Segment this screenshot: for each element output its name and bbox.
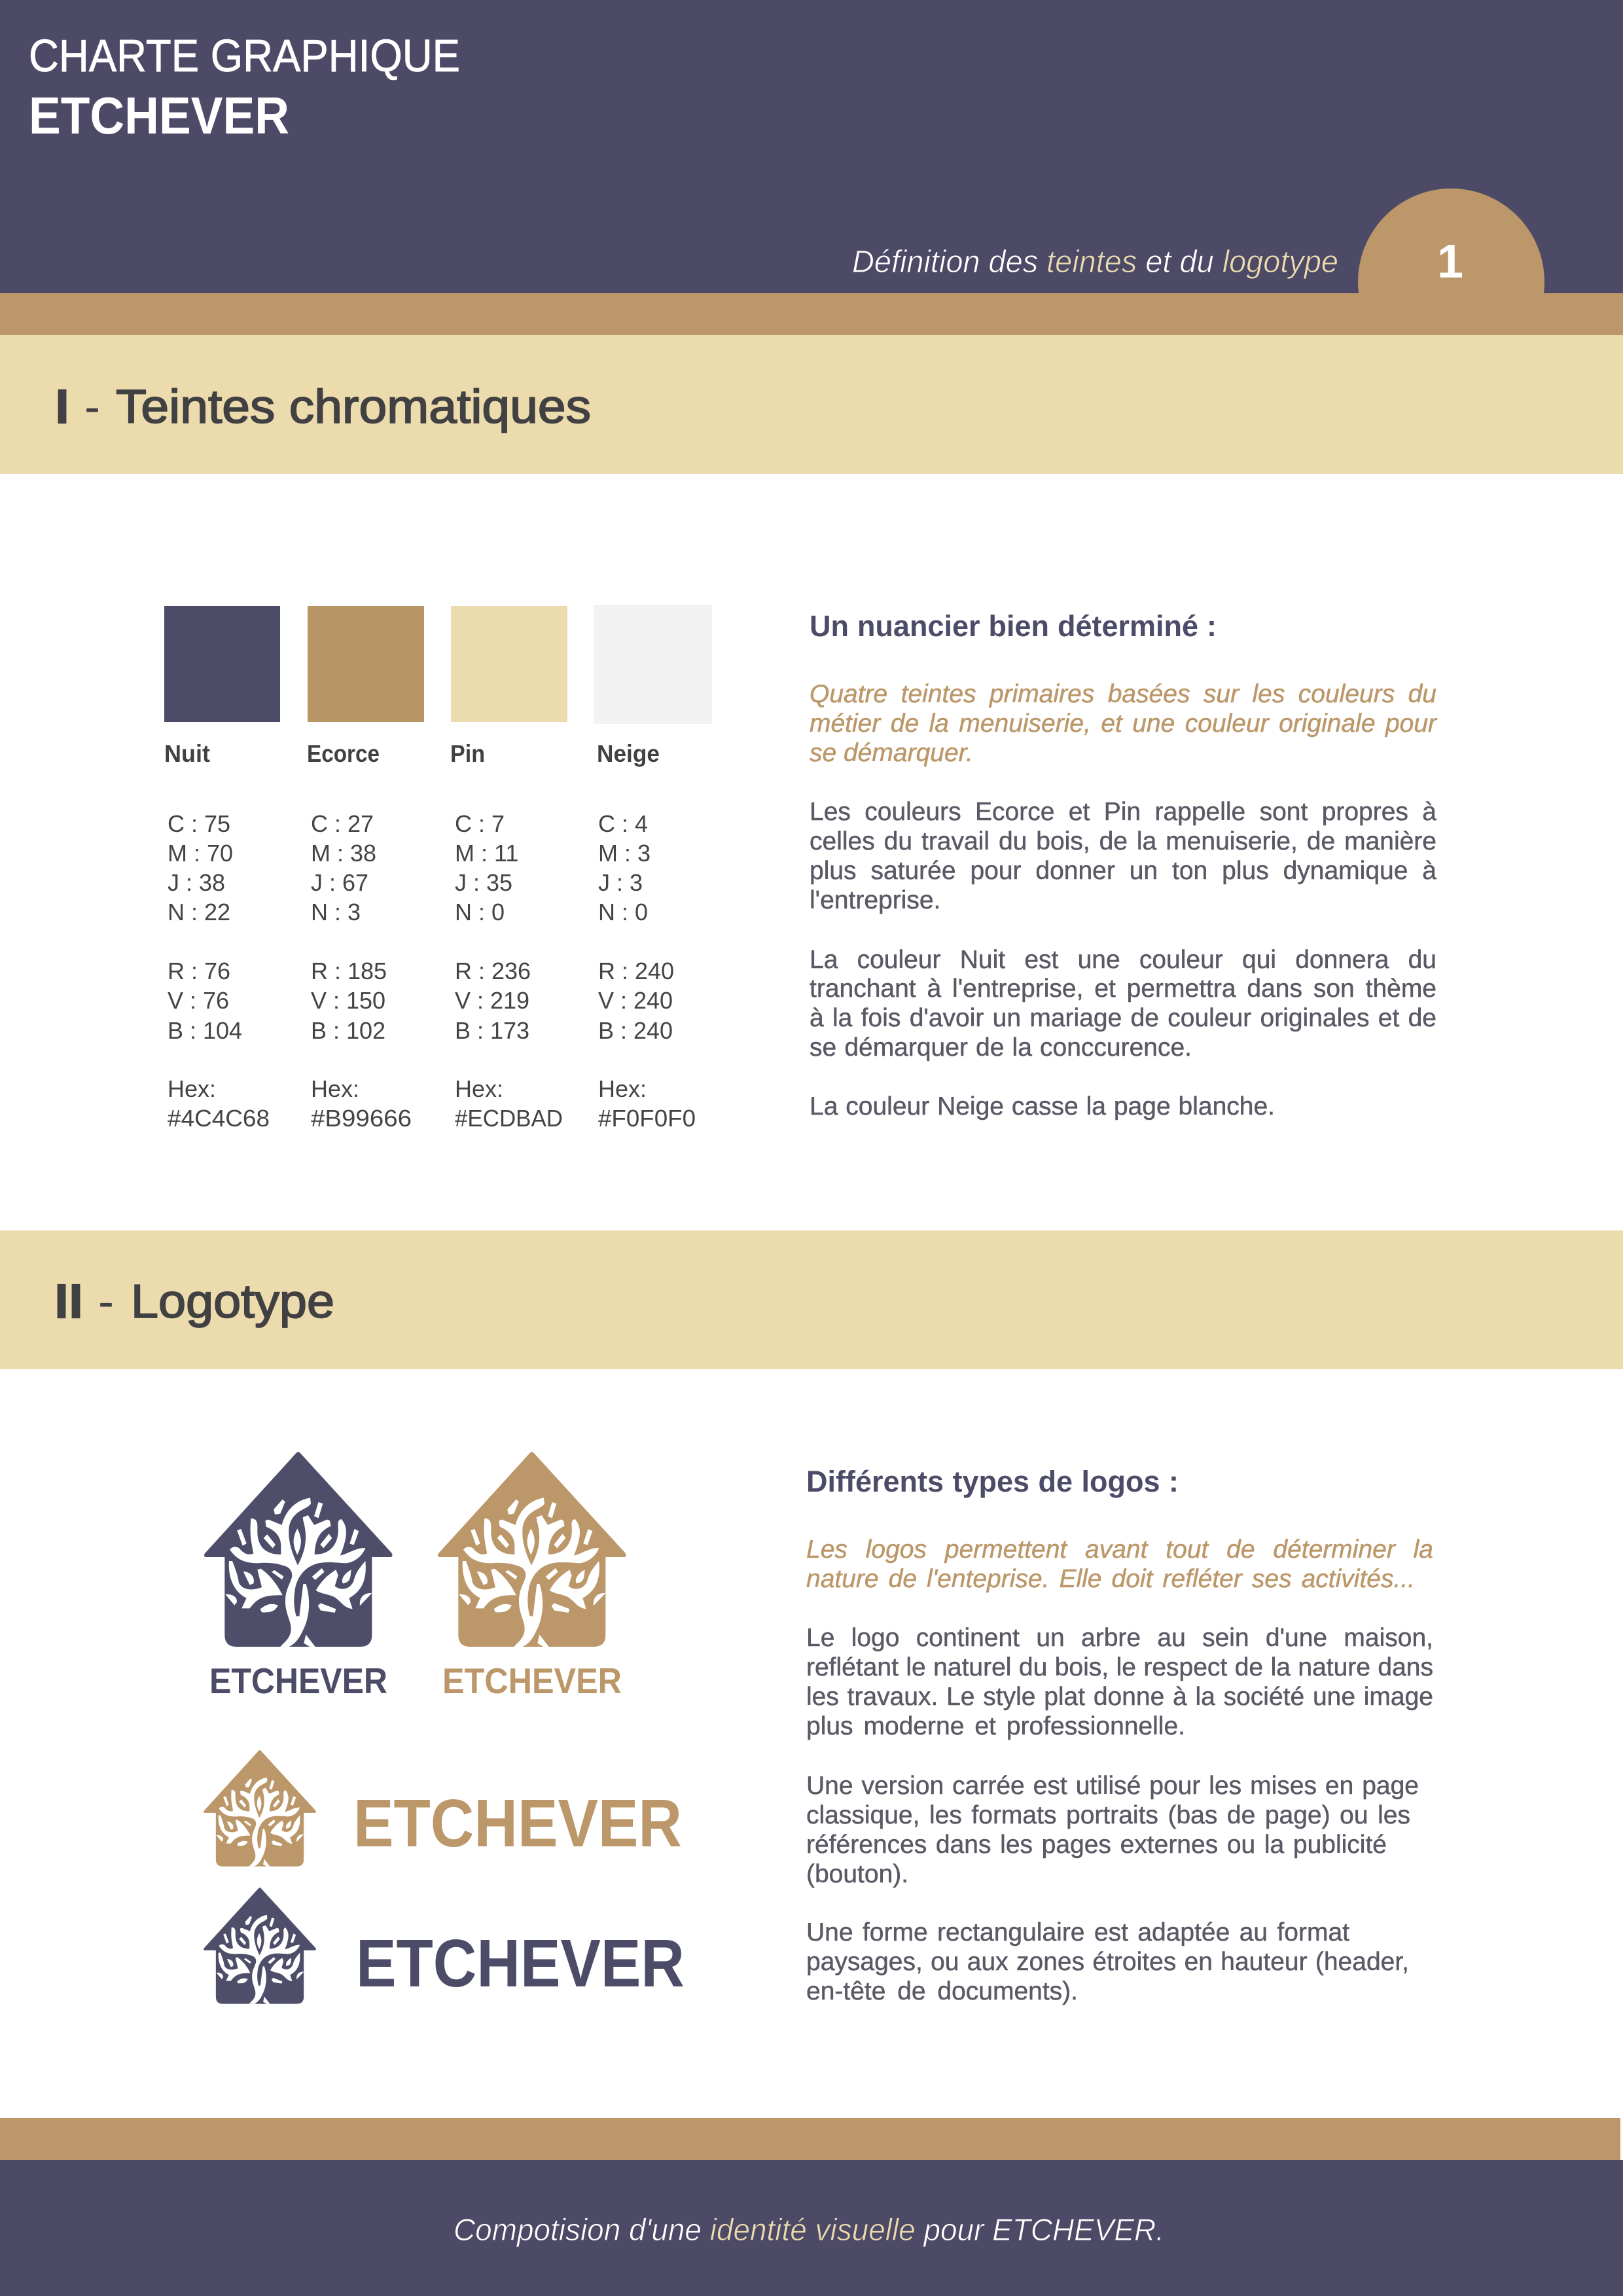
values: Pin: M : 11	[455, 840, 518, 867]
section heading II: II	[55, 1276, 82, 1328]
values: Neige: M : 3	[598, 840, 651, 867]
intro: nuancier	[809, 680, 1438, 767]
intro: logos: nature de l'enteprise. Elle doit refléter ses activités...	[806, 1565, 1415, 1593]
paragraph: version carrée: Une version carrée est utilisé pour les mises en page	[806, 1772, 1419, 1800]
values: Nuit	[168, 810, 270, 1132]
values: Neige: C : 4	[598, 810, 648, 837]
values: Pin: B : 173	[455, 1017, 529, 1044]
logo: vertical tan	[438, 1452, 626, 1701]
footer	[0, 2118, 1623, 2296]
title	[29, 30, 460, 145]
values: Pin: Hex:	[455, 1075, 503, 1102]
values: Neige: #F0F0F0	[598, 1105, 696, 1132]
values: Ecorce: M : 38	[311, 840, 376, 867]
paragraph: forme rectangulaire	[806, 1918, 1409, 2005]
paragraph: Nuit: se démarquer de la conccurence.	[810, 1033, 1192, 1062]
circle: page number badge	[1358, 188, 1544, 375]
values: Ecorce: N : 3	[311, 899, 361, 925]
heading: nuancier: Un nuancier bien déterminé :	[810, 609, 1217, 643]
subtitle: Définition des teintes et du logotype	[852, 245, 1338, 279]
paragraph: Nuit: tranchant à l'entreprise, et permettra dans son thème	[810, 975, 1436, 1003]
paragraph: Ecorce et Pin	[810, 798, 1437, 914]
logo: horizontal tan: ETCHEVER	[353, 1785, 682, 1861]
values: Neige: R : 240	[598, 958, 674, 984]
logo: vertical tan: ETCHEVER	[442, 1660, 622, 1701]
paragraph: forme rectangulaire: Une forme rectangulaire est adaptée au format	[806, 1918, 1349, 1946]
values: Pin: V : 219	[455, 987, 529, 1014]
text block: nuancier	[809, 609, 1438, 1121]
text block: logos	[806, 1465, 1433, 2005]
values: Pin: R : 236	[455, 958, 531, 984]
section heading I: Teintes chromatiques	[116, 381, 591, 433]
title: ETCHEVER	[29, 86, 289, 145]
swatch: Ecorce	[308, 606, 424, 722]
logo: horizontal tan	[204, 1750, 682, 1867]
values: Pin: N : 0	[455, 899, 505, 925]
swatch names: Ecorce	[307, 740, 380, 767]
header band	[0, 0, 1623, 375]
paragraph: Nuit: La couleur Nuit est une couleur qui donnera du	[810, 946, 1436, 974]
values: Nuit: Hex:	[168, 1075, 216, 1102]
section heading I	[0, 335, 1623, 474]
section heading I: I	[56, 381, 69, 433]
values: Nuit: V : 76	[168, 987, 229, 1014]
values: Nuit: M : 70	[168, 840, 233, 867]
paragraph: Ecorce et Pin: l'entreprise.	[810, 886, 940, 914]
swatch names: Nuit	[164, 740, 210, 767]
swatch names: Neige	[597, 740, 660, 767]
section heading I: -	[84, 381, 100, 433]
values: Neige	[598, 810, 696, 1132]
logo: vertical dark: ETCHEVER	[209, 1660, 387, 1701]
title: CHARTE GRAPHIQUE	[29, 30, 460, 81]
section heading II: Logotype	[131, 1276, 334, 1328]
paragraph: arbre et maison	[806, 1624, 1433, 1740]
intro: nuancier: métier de la menuiserie, et une couleur originale pour	[810, 709, 1436, 738]
values: Pin: C : 7	[455, 810, 505, 837]
section heading II	[0, 1230, 1623, 1369]
paragraph: version carrée: classique, les formats portraits (bas de page) ou les	[806, 1801, 1410, 1829]
values: Neige: N : 0	[598, 899, 648, 925]
paragraph: version carrée: (bouton).	[806, 1860, 908, 1888]
values: Nuit: N : 22	[168, 899, 230, 925]
values: Neige: V : 240	[598, 987, 673, 1014]
paragraph: arbre et maison: les travaux. Le style plat donne à la société une image	[806, 1683, 1433, 1711]
values: Neige: J : 3	[598, 869, 643, 896]
swatch names	[164, 740, 660, 767]
paragraph: Nuit: à la fois d'avoir un mariage de couleur originales et de	[810, 1004, 1436, 1032]
footer text: Compotision d'une identité visuelle pour ETCHEVER.	[454, 2212, 1164, 2247]
paragraph: Neige: La couleur Neige casse la page blanche.	[810, 1092, 1275, 1121]
values: Pin: J : 35	[455, 869, 512, 896]
swatch: Pin	[451, 606, 567, 722]
values: Nuit: R : 76	[168, 958, 230, 984]
intro: logos: Les logos permettent avant tout de déterminer la	[806, 1535, 1433, 1564]
values: Pin	[455, 810, 563, 1132]
values: Ecorce: C : 27	[311, 810, 374, 837]
logo: horizontal dark	[204, 1888, 685, 2004]
intro: nuancier: Quatre teintes primaires basées sur les couleurs du	[810, 680, 1436, 708]
values: Ecorce: R : 185	[311, 958, 387, 984]
swatch: Nuit	[164, 606, 280, 722]
colour swatches	[164, 605, 712, 724]
intro: logos	[806, 1535, 1433, 1593]
paragraph: forme rectangulaire: paysages, ou aux zones étroites en hauteur (header,	[806, 1948, 1409, 1976]
values: Nuit: C : 75	[168, 810, 230, 837]
logo: vertical dark	[204, 1452, 393, 1701]
values: Neige: Hex:	[598, 1075, 647, 1102]
paragraph: version carrée	[806, 1772, 1419, 1888]
values: Ecorce: V : 150	[311, 987, 385, 1014]
values: Nuit: B : 104	[168, 1017, 242, 1044]
paragraph: Ecorce et Pin: Les couleurs Ecorce et Pin rappelle sont propres à	[810, 798, 1436, 826]
values: Nuit: J : 38	[168, 869, 225, 896]
values: Neige: B : 240	[598, 1017, 673, 1044]
paragraph: arbre et maison: plus moderne et professionnelle.	[806, 1712, 1185, 1740]
paragraph: Ecorce et Pin: celles du travail du bois, de la menuiserie, de manière	[810, 827, 1436, 855]
paragraph: arbre et maison: Le logo continent un arbre au sein d'une maison,	[806, 1624, 1433, 1652]
values: Pin: #ECDBAD	[455, 1105, 563, 1132]
values: Nuit: #4C4C68	[168, 1105, 270, 1132]
intro: nuancier: se démarquer.	[810, 739, 973, 767]
paragraph: arbre et maison: reflétant le naturel du bois, le respect de la nature dans	[806, 1653, 1433, 1681]
values: Ecorce: J : 67	[311, 869, 368, 896]
logo: horizontal dark: ETCHEVER	[356, 1926, 685, 2001]
paragraph: version carrée: références dans les pages externes ou la publicité	[806, 1831, 1387, 1859]
swatch: Neige	[594, 605, 712, 724]
values: Ecorce: B : 102	[311, 1017, 385, 1044]
page number: 1	[1437, 236, 1463, 288]
section heading II: -	[98, 1276, 114, 1328]
paragraph: Nuit	[810, 946, 1436, 1062]
values: Ecorce: Hex:	[311, 1075, 359, 1102]
heading: logos: Différents types de logos :	[806, 1465, 1179, 1498]
paragraph: Ecorce et Pin: plus saturée pour donner un ton plus dynamique à	[810, 857, 1436, 885]
values: Ecorce: #B99666	[311, 1105, 412, 1132]
values: Ecorce	[311, 810, 412, 1132]
paragraph: forme rectangulaire: en-tête de documents).	[806, 1977, 1078, 2005]
swatch names: Pin	[450, 740, 485, 767]
